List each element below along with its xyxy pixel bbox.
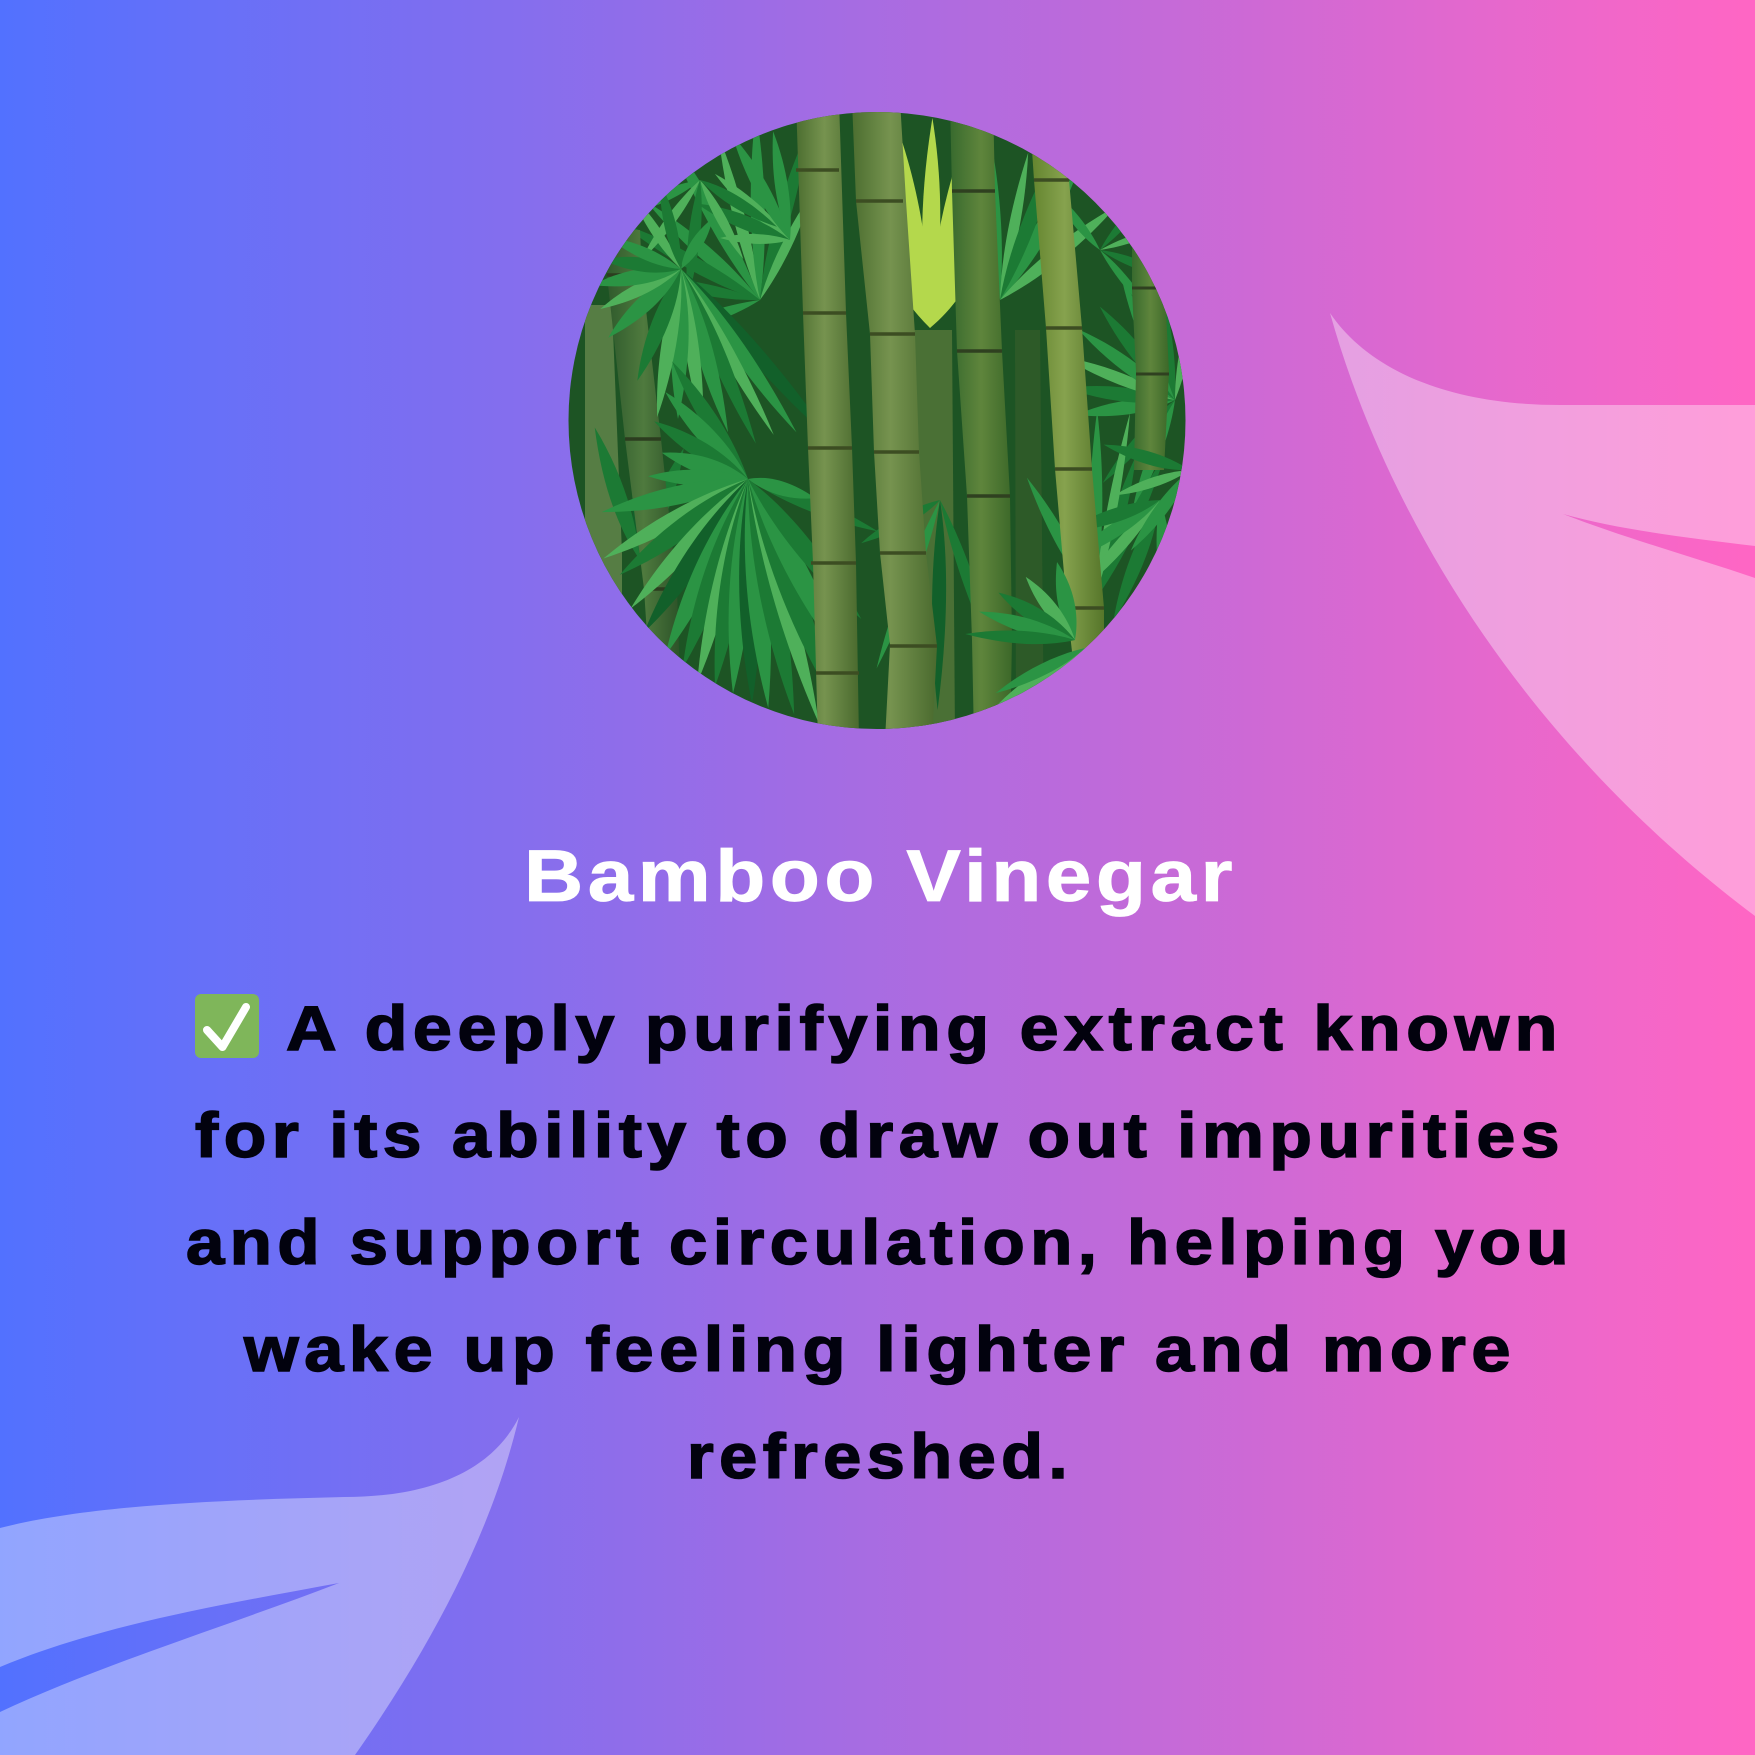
stalk 5: [1132, 240, 1169, 470]
fronds: upper left fan: [600, 196, 806, 444]
back foliage: top middle greens: [986, 132, 1108, 300]
body text: [186, 994, 1574, 1492]
right foliage: [1082, 283, 1182, 503]
icon: green check mark emoji: [195, 994, 259, 1058]
body text: refreshed.: [687, 1422, 1073, 1492]
stalk 3: [950, 100, 1012, 740]
body text: wake up feeling lighter and more: [243, 1315, 1516, 1385]
decorative leaf: bottom left: [0, 1417, 519, 1755]
stalk: far left: [607, 230, 680, 680]
lower right fronds: [965, 560, 1084, 646]
body text: and support circulation, helping you: [186, 1208, 1574, 1278]
title: Bamboo Vinegar: [524, 836, 1237, 917]
fronds behind central stalks: [862, 500, 971, 710]
stalk 4: [1032, 150, 1104, 660]
bright yellow-green frond: [902, 118, 956, 328]
bottom right light blade: [990, 642, 1088, 715]
back foliage: upper left spikes: [632, 135, 800, 316]
stalk 2: [852, 100, 937, 740]
body text: A deeply purifying extract known: [286, 994, 1563, 1064]
circular bamboo forest photo: [560, 100, 1200, 740]
small right leaves: [1102, 440, 1195, 555]
stalk 1: [796, 100, 859, 740]
back stems: [585, 305, 1044, 740]
body text: for its ability to draw out impurities: [195, 1101, 1565, 1171]
decorative leaf: top right: [1330, 313, 1755, 916]
fronds: lower left fan: [600, 358, 881, 726]
